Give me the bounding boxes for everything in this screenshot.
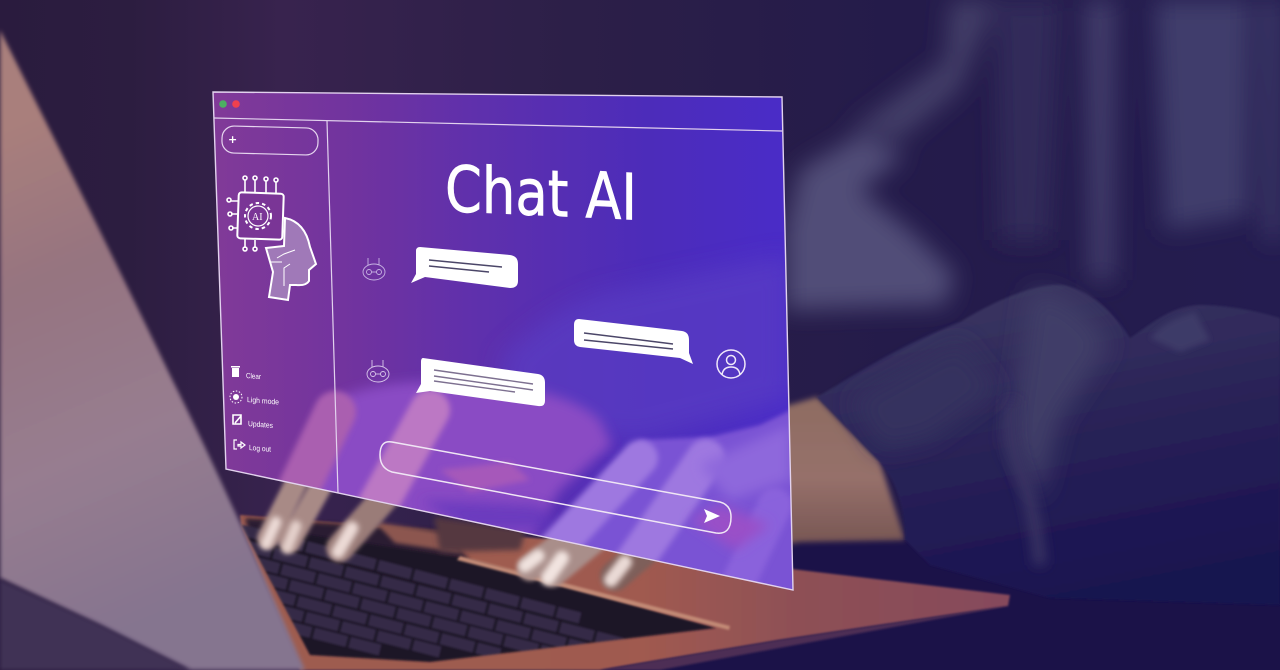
holographic panel — [213, 92, 795, 595]
hands seen through panel — [298, 255, 795, 595]
icon: robot 1 — [363, 258, 385, 280]
window buttons — [219, 100, 240, 108]
blurred torso and sweater — [785, 0, 1280, 310]
right hand wrist — [700, 397, 905, 560]
icon: trash — [231, 366, 240, 377]
sidebar menu — [230, 366, 279, 454]
icon: send arrow — [704, 509, 720, 523]
icon: sun — [230, 391, 242, 403]
label: Updates: Updates — [248, 419, 273, 430]
chat bubble 3 — [416, 358, 545, 406]
dark gap above keys — [245, 518, 470, 560]
lower lid shadow — [0, 580, 190, 670]
chat bubble 1 — [411, 247, 518, 288]
chat bubble 2 — [574, 319, 693, 364]
icon: user — [717, 350, 745, 378]
new chat button: + — [228, 133, 237, 146]
knit sleeve — [817, 285, 1280, 605]
panel frame and dividers — [213, 92, 793, 590]
icon: AI chip and head: AI — [252, 212, 263, 223]
icon: robot 2 — [367, 360, 389, 382]
input box — [380, 442, 731, 533]
laptop base — [235, 515, 1010, 670]
desk — [600, 540, 1280, 670]
label: Clear: Clear — [246, 371, 261, 381]
keyboard — [235, 525, 716, 662]
new chat button — [222, 126, 318, 155]
laptop lid — [0, 30, 305, 670]
fingers below panel — [266, 465, 675, 580]
icon: log out — [234, 440, 245, 449]
heading: Chat AI: Chat AI — [445, 153, 637, 236]
label: Log out: Log out — [249, 443, 272, 454]
icon: edit — [233, 415, 241, 424]
label: Ligh mode: Ligh mode — [247, 395, 279, 407]
icon: AI chip and head — [227, 176, 316, 300]
